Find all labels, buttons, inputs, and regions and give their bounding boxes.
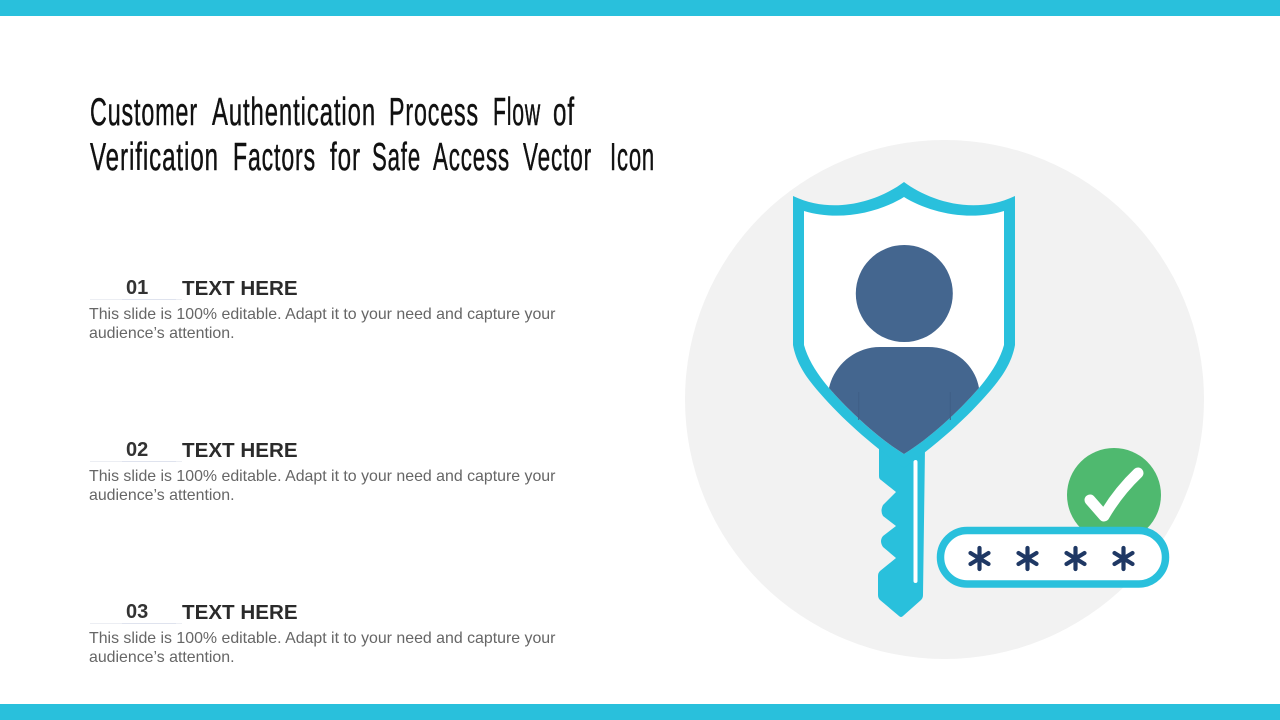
- list item 02: [89, 439, 556, 504]
- title: [90, 91, 655, 179]
- description 01: audience’s attention.: [89, 325, 234, 342]
- description 01: This slide is 100% editable. Adapt it to your need and capture your: [89, 306, 555, 322]
- list item 03: [89, 601, 556, 666]
- title: for: [330, 136, 361, 179]
- icon: user: [829, 245, 979, 454]
- title: Safe: [372, 136, 421, 179]
- title: Authentication: [212, 91, 376, 134]
- description 03: This slide is 100% editable. Adapt it to your need and capture your: [89, 630, 555, 646]
- top bar: [0, 0, 1280, 16]
- title: Factors: [233, 136, 316, 179]
- description 02: This slide is 100% editable. Adapt it to your need and capture your: [89, 468, 555, 484]
- bottom bar: [0, 704, 1280, 720]
- list item 01: [89, 277, 556, 342]
- description 01: [89, 306, 556, 342]
- heading 01: TEXT HERE: [182, 277, 298, 300]
- title: Vector: [523, 136, 592, 179]
- description 02: [89, 468, 556, 504]
- title: Flow: [493, 91, 541, 134]
- user body: [829, 347, 979, 454]
- heading 03: TEXT HERE: [182, 601, 298, 624]
- description 03: audience’s attention.: [89, 649, 234, 666]
- icon: shield: [793, 182, 1015, 468]
- title: of: [553, 91, 575, 134]
- number 03: 03: [126, 601, 148, 623]
- password field: [940, 530, 1166, 584]
- password asterisks: [970, 548, 1132, 569]
- number 01: 01: [126, 277, 148, 299]
- title: Access: [433, 136, 510, 179]
- heading 02: TEXT HERE: [182, 439, 298, 462]
- icon: green check badge: [1067, 448, 1161, 542]
- title: Process: [389, 91, 479, 134]
- title: Customer: [90, 91, 198, 134]
- icon: key blade: [878, 448, 925, 617]
- description 02: audience’s attention.: [89, 487, 234, 504]
- title: Verification: [90, 136, 219, 179]
- number 02: 02: [126, 439, 148, 461]
- background circle: [685, 140, 1204, 659]
- description 03: [89, 630, 556, 666]
- user head: [856, 245, 953, 342]
